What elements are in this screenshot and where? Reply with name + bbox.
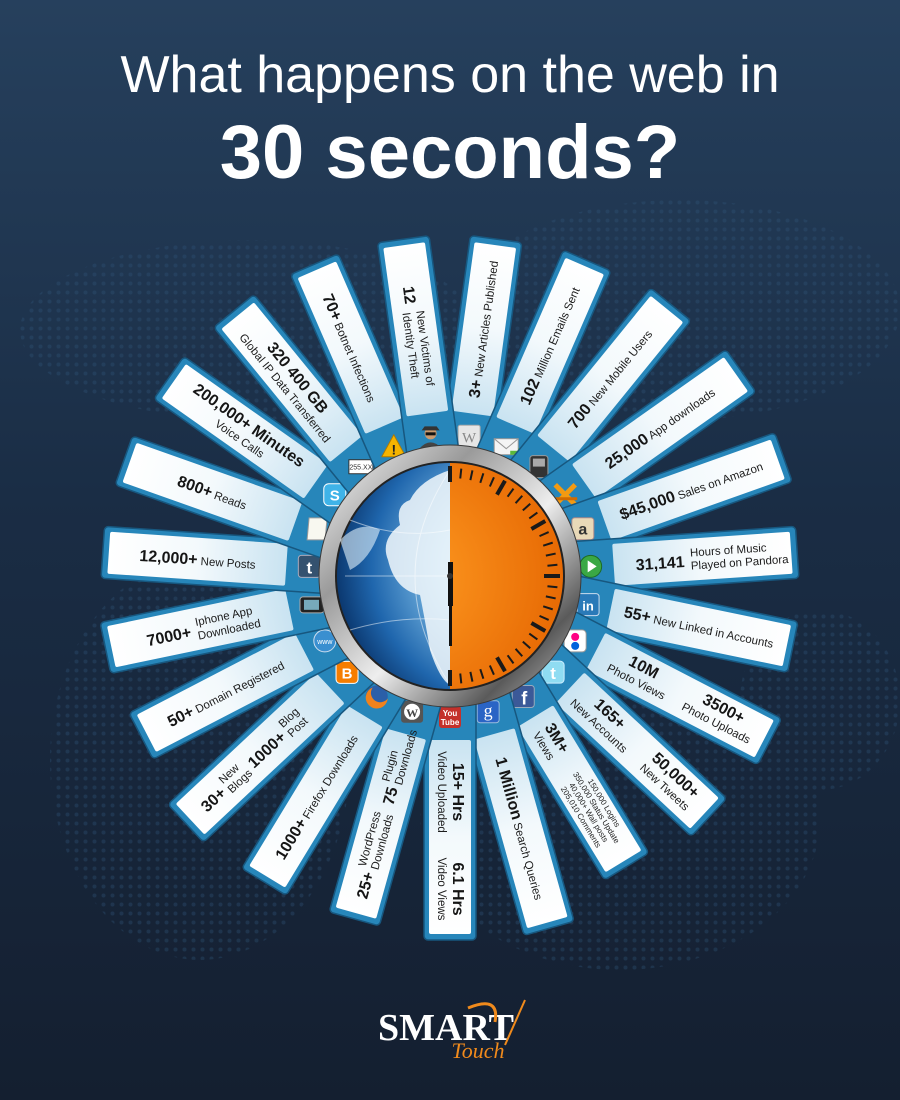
clock ticks bbox=[450, 466, 560, 686]
ray: pandora: Hours of Music bbox=[690, 542, 767, 560]
icon: firefox bbox=[366, 685, 388, 709]
ray: iphone: Iphone App bbox=[194, 605, 253, 629]
icon: warning bbox=[382, 435, 406, 458]
icon: youtube: Tube bbox=[441, 718, 460, 727]
ray: flickr bbox=[543, 607, 782, 765]
ray: youtube: 15+ Hrs bbox=[449, 763, 466, 821]
icon: www globe bbox=[314, 630, 336, 652]
ray: emails bbox=[473, 250, 611, 478]
ray: identity theft: New Victims of bbox=[413, 310, 436, 387]
ray: domain: 50+ Domain Registered bbox=[165, 657, 287, 731]
icon: data meter bbox=[349, 460, 373, 474]
ray: pandora: Played on Pandora bbox=[691, 554, 790, 573]
icon: flickr bbox=[564, 630, 586, 652]
ray: wordpress: 25+ bbox=[354, 870, 378, 901]
icon: facebook: f bbox=[521, 688, 528, 708]
icon: www globe: www bbox=[316, 639, 333, 646]
ray: twitter: New Tweets bbox=[637, 762, 691, 814]
ray: data transferred bbox=[214, 295, 396, 501]
icon: amazon bbox=[572, 518, 594, 540]
ray: youtube: Video Uploaded bbox=[435, 751, 447, 833]
ray: wordpress: WordPress bbox=[357, 810, 384, 868]
clock face: globe half bbox=[337, 463, 450, 689]
ray: linkedin bbox=[560, 574, 798, 672]
ray: domain bbox=[129, 607, 357, 759]
icon: tumblr: t bbox=[306, 558, 312, 577]
ray: google bbox=[457, 683, 574, 935]
icon: pandora bbox=[580, 555, 602, 577]
icon: phone bbox=[530, 456, 548, 478]
ray: skype: 200,000+ Minutes bbox=[190, 381, 308, 471]
ray: youtube: 6.1 Hrs bbox=[449, 862, 466, 916]
clock bezel bbox=[319, 445, 581, 707]
clock bbox=[319, 445, 581, 707]
ray: youtube: Video Views bbox=[435, 858, 447, 921]
title bbox=[120, 46, 780, 195]
ray: blogger: Blog bbox=[277, 706, 302, 730]
icon: twitter: t bbox=[550, 664, 556, 683]
logo bbox=[378, 1000, 525, 1063]
ray: wordpress: 75 bbox=[381, 785, 402, 807]
ray: iphone bbox=[100, 575, 340, 673]
ray: flickr: Photo Views bbox=[605, 662, 667, 703]
icon: iphone bbox=[300, 597, 324, 613]
ray: app downloads bbox=[531, 350, 756, 529]
icon: paper bbox=[307, 518, 327, 540]
radial rays bbox=[100, 236, 799, 940]
icon: tumblr bbox=[298, 555, 320, 577]
ray: google: 1 Million Search Queries bbox=[491, 756, 548, 902]
ray: twitter: New Accounts bbox=[567, 697, 629, 756]
ray: new articles: 3+ New Articles Published bbox=[466, 260, 502, 399]
ray: blogger bbox=[168, 638, 382, 842]
ray: skype bbox=[154, 356, 369, 529]
ray: facebook: 40,000+ Wall posts bbox=[567, 781, 610, 844]
ray: flickr: 10M bbox=[626, 653, 661, 683]
ray: amazon: $45,000 Sales on Amazon bbox=[618, 457, 765, 524]
ray: data transferred: Global IP Data Transferred bbox=[236, 332, 332, 445]
blue ring behind icons bbox=[290, 416, 610, 736]
icon: blogger: B bbox=[342, 665, 353, 682]
ray: facebook: Views bbox=[530, 730, 556, 763]
icon: envelope bbox=[494, 439, 522, 458]
icon: app store bbox=[553, 485, 577, 505]
ray: identity theft: 12 bbox=[399, 285, 418, 305]
ray: tumblr bbox=[101, 526, 334, 594]
icon: wikipedia bbox=[458, 425, 480, 447]
icon: youtube bbox=[439, 706, 461, 728]
ray: tumblr: 12,000+ New Posts bbox=[139, 548, 256, 573]
ray: firefox bbox=[242, 663, 411, 895]
icon: warning: ! bbox=[391, 442, 396, 458]
ray: wordpress: Downloads bbox=[369, 813, 396, 871]
icon: twitter bbox=[542, 661, 564, 683]
ray: emails: 102 Million Emails Sent bbox=[517, 284, 584, 408]
icon: google: g bbox=[484, 701, 493, 721]
ray: blogger: Blogs bbox=[226, 767, 255, 796]
icon: spy bbox=[420, 426, 442, 448]
ray: wordpress bbox=[329, 683, 443, 926]
ray: skype: Voice Calls bbox=[212, 418, 266, 461]
icon: youtube: You bbox=[443, 709, 457, 718]
ray: flickr: 3500+ bbox=[699, 691, 747, 727]
ray: wordpress: Plugin bbox=[381, 749, 401, 783]
ray: data transferred: 320 400 GB bbox=[263, 339, 331, 417]
ray: blogger: 1000+ bbox=[245, 729, 290, 772]
icon: wikipedia: W bbox=[462, 430, 477, 446]
ray: facebook: 205,010 Comments bbox=[559, 785, 603, 849]
ray: botnet: 70+ Botnet Infections bbox=[318, 292, 380, 405]
ray: pandora bbox=[566, 526, 799, 594]
ray: iphone: 7000+ bbox=[145, 624, 193, 650]
ray: reads: 800+ Reads bbox=[175, 473, 249, 513]
ray: amazon bbox=[552, 433, 792, 561]
title: 30 seconds? bbox=[220, 110, 680, 195]
icon: blogger bbox=[336, 661, 358, 683]
ray: facebook: 150,000 Logins bbox=[586, 777, 622, 829]
ray: youtube bbox=[424, 694, 476, 940]
ray: iphone: Downloaded bbox=[197, 618, 262, 643]
ray: identity theft bbox=[378, 236, 460, 463]
ray: twitter: 165+ bbox=[590, 696, 628, 733]
logo: Touch bbox=[452, 1038, 504, 1063]
icon: facebook bbox=[512, 685, 534, 708]
background dotted world map bbox=[20, 200, 898, 970]
ray: app downloads: 25,000 App downloads bbox=[602, 384, 719, 473]
ray: linkedin: 55+ New Linked in Accounts bbox=[622, 604, 775, 652]
icon: linkedin bbox=[577, 594, 599, 616]
ray: pandora: 31,141 bbox=[635, 554, 685, 574]
ray: botnet bbox=[291, 254, 427, 478]
clock face: orange half bbox=[450, 463, 563, 689]
icon: data meter: 255.XX bbox=[349, 465, 373, 472]
clock hands bbox=[447, 562, 453, 646]
icon: skype bbox=[324, 484, 346, 506]
title: What happens on the web in bbox=[120, 46, 780, 104]
icon: skype: S bbox=[330, 488, 340, 505]
icon: amazon: a bbox=[578, 522, 587, 539]
ray: identity theft: Identity Theft bbox=[399, 312, 421, 380]
ray: firefox: 1000+ Firefox Downloads bbox=[273, 731, 362, 863]
icon: linkedin: in bbox=[582, 599, 594, 614]
ray: blogger: New bbox=[217, 761, 242, 786]
ray: new articles bbox=[440, 236, 522, 463]
ray: blogger: 30+ bbox=[198, 785, 230, 816]
ray: mobile users bbox=[504, 288, 691, 501]
icon: wordpress bbox=[401, 701, 423, 723]
ray: facebook: 3M+ bbox=[541, 720, 572, 756]
ray: facebook: 350,000 Status Update bbox=[571, 770, 622, 846]
ray: flickr: Photo Uploads bbox=[679, 701, 752, 747]
icon: google bbox=[477, 701, 499, 723]
ray: facebook bbox=[489, 663, 649, 880]
ray: wordpress: Downloads bbox=[393, 728, 420, 787]
ray: blogger: Post bbox=[286, 715, 311, 740]
logo: SMART bbox=[378, 1007, 514, 1049]
ray: twitter bbox=[519, 637, 727, 836]
ray: twitter: 50,000+ bbox=[648, 750, 702, 802]
ray: reads bbox=[115, 436, 347, 561]
ray: mobile users: 700 New Mobile Users bbox=[565, 326, 656, 432]
icon: wordpress: W bbox=[406, 706, 418, 720]
